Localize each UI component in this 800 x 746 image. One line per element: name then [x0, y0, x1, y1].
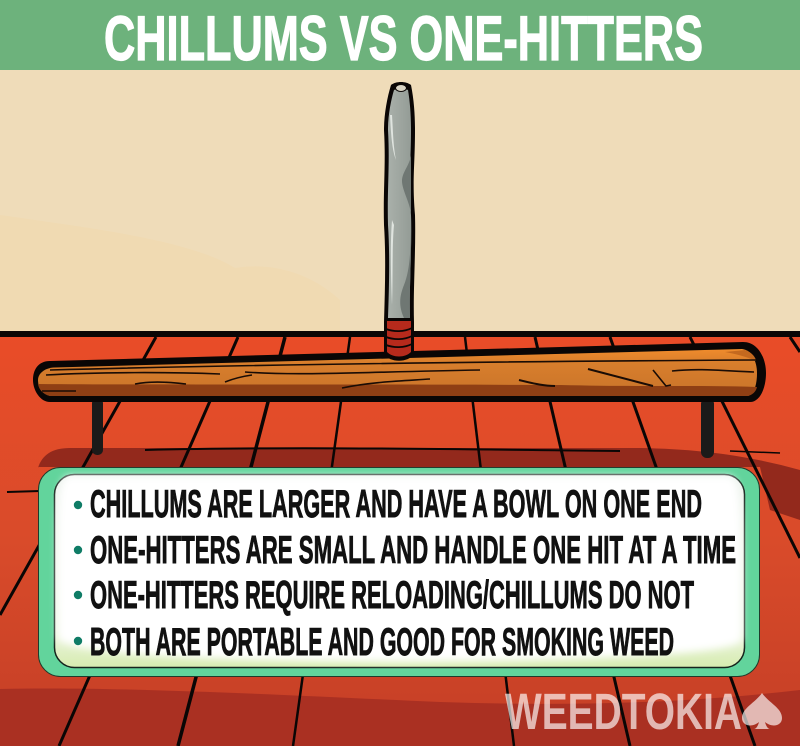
pipe shading — [400, 155, 411, 318]
bench legs — [92, 398, 714, 458]
floor — [0, 337, 800, 746]
wooden bench — [33, 342, 766, 402]
wood grain — [42, 360, 756, 391]
red wrap — [387, 321, 411, 356]
wall — [0, 70, 800, 337]
floor shadow at bottom — [0, 688, 800, 746]
one-hitter pipe — [384, 82, 415, 361]
floor boards — [0, 337, 800, 746]
title bar — [0, 0, 800, 74]
panel: key points — [38, 468, 760, 676]
floor shadow under bench — [38, 448, 800, 520]
icon: spade — [742, 693, 782, 729]
pipe mouth — [396, 84, 406, 92]
pipe highlights — [390, 115, 396, 305]
